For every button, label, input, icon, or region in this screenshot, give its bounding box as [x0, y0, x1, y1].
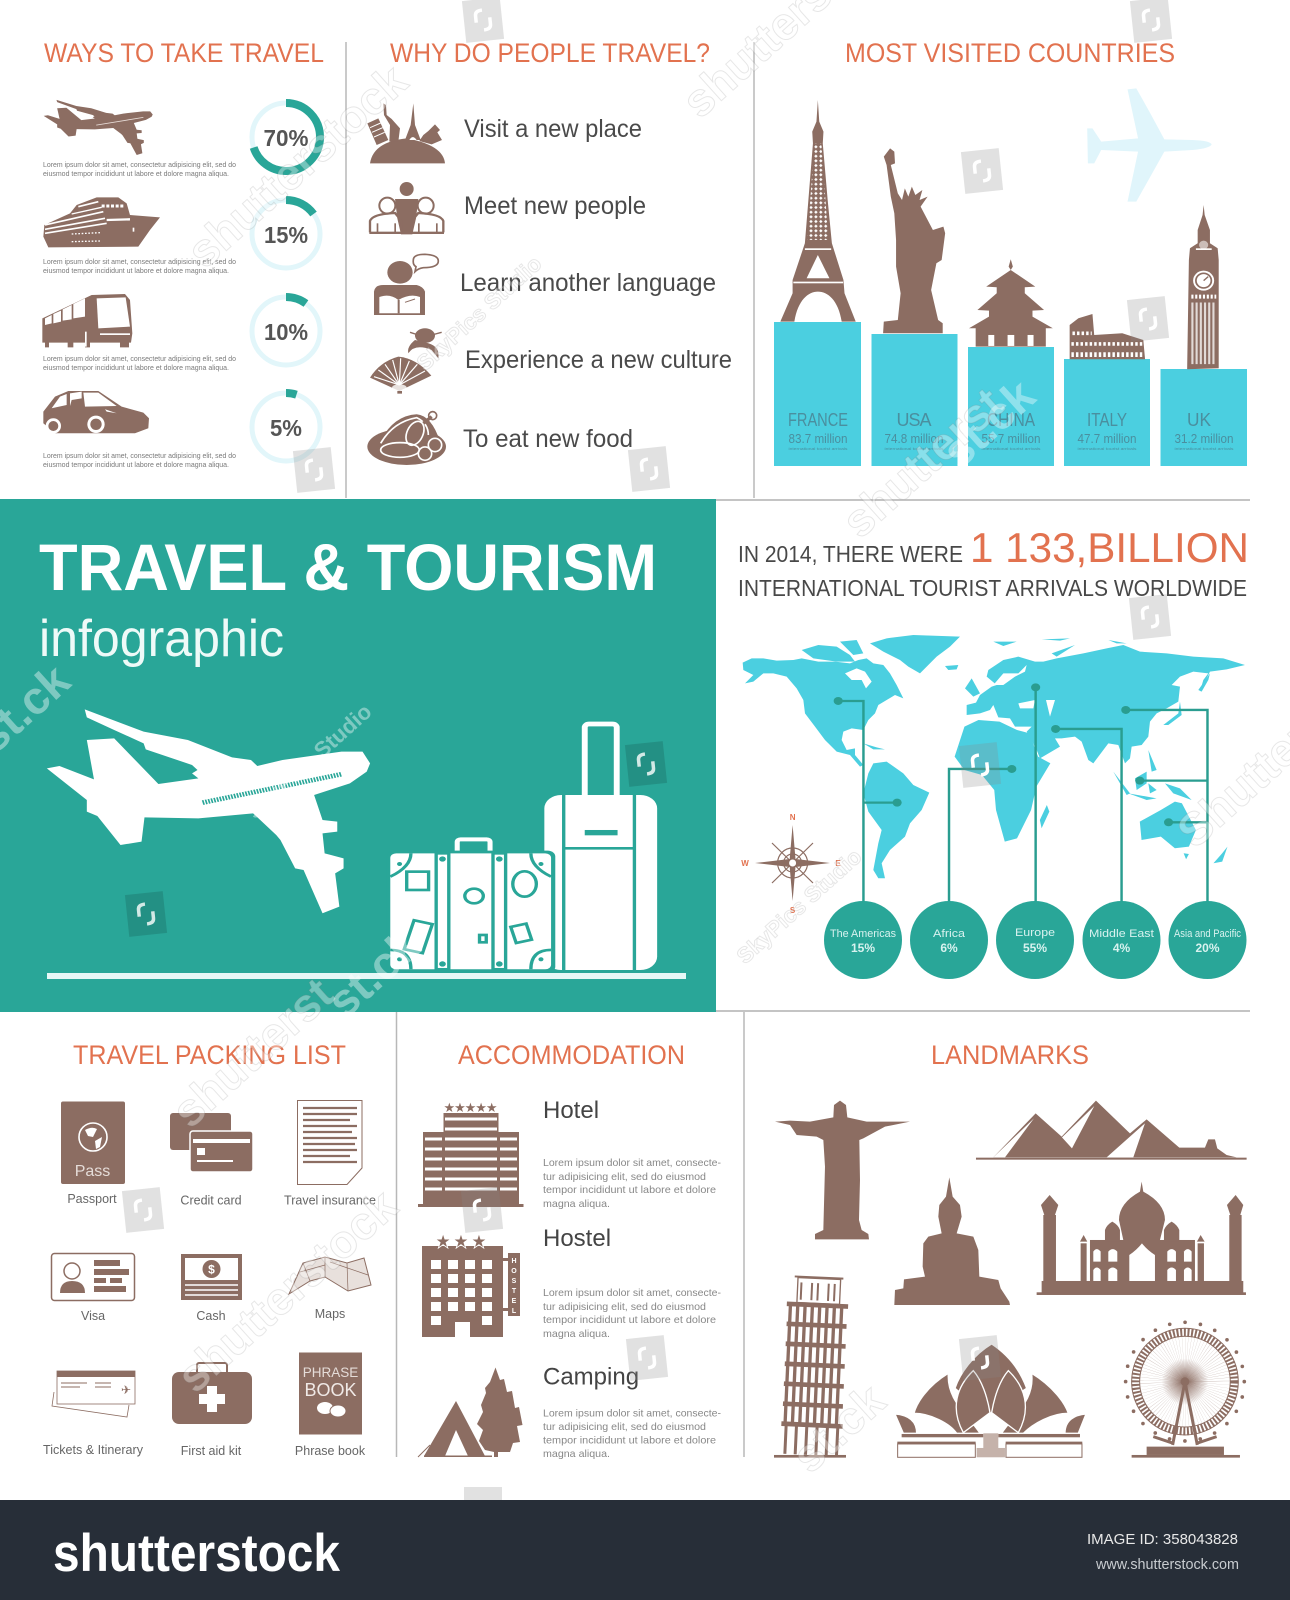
panel: travel packing list: [43, 1040, 376, 1458]
bar: France: [774, 322, 861, 466]
icon: hostel: S: [512, 1278, 517, 1285]
circle: The Americas: [824, 901, 902, 979]
item: cash: [181, 1254, 242, 1323]
item: cash: $: [208, 1262, 215, 1276]
text block: camping description: Lorem ipsum dolor sit amet, consecte-: [543, 1408, 721, 1420]
item: maps: [289, 1257, 371, 1321]
icon: vintage suitcase with stickers: [387, 839, 555, 973]
icon: rolling suitcase: [544, 724, 657, 970]
watermark overlay: SkyPics Studio: [732, 844, 866, 969]
circle: Asia and Pacific: 20%: [1195, 941, 1220, 955]
icon: hostel: E: [512, 1298, 517, 1305]
donut: 15%: 15%: [264, 222, 308, 248]
watermark overlay: shutterst: [832, 377, 1013, 547]
text block: hotel description: [543, 1157, 721, 1210]
donut: 5%: 5%: [270, 415, 302, 441]
circle: Middle East: Middle East: [1089, 928, 1154, 940]
icon: people meeting: [369, 182, 444, 234]
compass rose: N: [790, 813, 796, 822]
bar: USA: international tourist arrivals: [884, 447, 944, 451]
item: phrase book: [295, 1352, 366, 1458]
text block: hostel description: tur adipisicing elit, sed do eiusmod: [543, 1301, 706, 1313]
item: cash: Cash: [196, 1309, 226, 1323]
icon: big ben: [1187, 205, 1219, 369]
heading: ways to take travel: WAYS TO TAKE TRAVEL: [44, 38, 324, 68]
item: first aid kit: [172, 1363, 252, 1458]
panel: accommodation: [418, 1040, 721, 1460]
watermark overlay: shutterstock: [167, 1179, 407, 1402]
icon: large white airplane: [47, 709, 370, 913]
icon: airplane: [44, 100, 153, 155]
bar: USA: USA: [896, 410, 932, 430]
circle: The Americas: 15%: [851, 941, 875, 955]
icon: taj mahal: [1037, 1182, 1246, 1295]
bar: UK: [1160, 369, 1247, 466]
label: learn another language: Learn another language: [460, 269, 716, 297]
icon: hotel: [418, 1100, 524, 1207]
text block: lorem 2: eiusmod tempor incididunt ut labore et dolore magna aliqua.: [43, 266, 229, 275]
label: visit a new place: Visit a new place: [464, 115, 642, 143]
text block: hotel description: Lorem ipsum dolor sit amet, consecte-: [543, 1157, 721, 1169]
donut: 10%: 10%: [264, 319, 308, 345]
icon: person reading with speech bubble: [374, 254, 438, 315]
text block: camping description: tempor incididunt ut labore et dolore: [543, 1434, 716, 1446]
label: hotel: Hotel: [543, 1097, 599, 1124]
label: camping: Camping: [543, 1364, 639, 1390]
bar: France: 83.7 million: [788, 432, 848, 446]
label: hostel: Hostel: [543, 1225, 611, 1252]
heading: tourist arrivals headline: INTERNATIONAL TOURIST ARRIVALS WORLDWIDE: [738, 575, 1247, 601]
bar: China: CHINA: [987, 410, 1035, 430]
icon: hostel: T: [512, 1288, 517, 1295]
heading: travel packing list: TRAVEL PACKING LIST: [73, 1040, 346, 1070]
item: visa: Visa: [81, 1309, 105, 1323]
bar: UK: UK: [1187, 410, 1211, 430]
text block: hostel description: tempor incididunt ut labore et dolore: [543, 1314, 716, 1326]
text block: lorem 3: Lorem ipsum dolor sit amet, consectetur adipisicing elit, sed do: [43, 354, 236, 363]
icon: hostel: H: [511, 1258, 517, 1265]
footer image id: IMAGE ID: 358043828: [1087, 1531, 1238, 1548]
ground line: [47, 973, 686, 979]
circle: Africa: [910, 901, 988, 979]
icon: leaning tower of pisa: [774, 1276, 849, 1458]
icon: eiffel tower: [780, 100, 856, 322]
item: maps: Maps: [315, 1307, 345, 1321]
heading: landmarks: LANDMARKS: [931, 1040, 1089, 1070]
subtitle: infographic: [39, 610, 284, 668]
donut: 10%: [252, 297, 320, 365]
icon: bus: [42, 294, 132, 347]
icon: hotel: ★★★★★: [444, 1100, 498, 1115]
item: travel insurance: [284, 1100, 376, 1208]
watermark overlay: SkyPics Studio: [412, 251, 546, 376]
icon: tent and pine tree: [418, 1368, 522, 1457]
panel: ways to take travel: [42, 38, 324, 469]
text block: lorem 2: [43, 257, 236, 275]
item: visa: [52, 1254, 134, 1323]
icon: fan and geisha: [370, 328, 442, 394]
bar: USA: 74.8 million: [884, 432, 944, 446]
bar: Italy: ITALY: [1087, 410, 1127, 430]
circle: Europe: Europe: [1015, 927, 1055, 939]
icon: ferris wheel: [1126, 1322, 1244, 1458]
icon: hostel: L: [512, 1308, 517, 1315]
watermark overlay: st.ck: [782, 1373, 895, 1482]
circle: Europe: 55%: [1023, 941, 1047, 955]
icon: car: [43, 391, 149, 434]
watermark overlay: shutterst: [162, 967, 343, 1137]
circle: Asia and Pacific: Asia and Pacific: [1174, 928, 1241, 940]
footer image id: [1087, 1531, 1239, 1573]
main title: TRAVEL & TOURISM: [39, 530, 657, 604]
heading: tourist arrivals headline: [738, 524, 1249, 601]
heading: accommodation: ACCOMMODATION: [458, 1040, 685, 1070]
compass rose: S: [790, 906, 796, 915]
item: credit card: Credit card: [180, 1194, 242, 1208]
text block: lorem 4: Lorem ipsum dolor sit amet, consectetur adipisicing elit, sed do: [43, 451, 236, 460]
icon: statue of liberty: [883, 148, 945, 333]
text block: lorem 1: Lorem ipsum dolor sit amet, consectetur adipisicing elit, sed do: [43, 160, 236, 169]
bar: France: FRANCE: [788, 410, 848, 430]
heading: tourist arrivals headline: 1 133,BILLION: [970, 524, 1249, 571]
text block: hostel description: [543, 1287, 721, 1340]
bar: France: international tourist arrivals: [788, 447, 848, 451]
donut: 70%: 70%: [264, 125, 308, 151]
label: experience a new culture: Experience a new culture: [465, 346, 732, 374]
watermark overlay: shutterstock: [177, 54, 417, 277]
item: passport: Pass: [75, 1163, 110, 1180]
panel: world tourist arrivals: [738, 524, 1249, 979]
item: phrase book: Phrase book: [295, 1444, 366, 1458]
watermark overlay: SkyPics Studio: [242, 699, 376, 824]
heading: tourist arrivals headline: IN 2014, THERE WERE: [738, 541, 963, 567]
icon: buddha: [894, 1177, 1010, 1305]
world map: [743, 635, 1245, 878]
icon: roast chicken: [367, 412, 446, 465]
label: meet new people: Meet new people: [464, 192, 646, 220]
watermark overlay: st.ck: [932, 368, 1045, 477]
bar: UK: 31.2 million: [1174, 432, 1234, 446]
compass rose: [741, 813, 841, 915]
text block: lorem 3: [43, 354, 236, 372]
item: phrase book: BOOK: [304, 1380, 357, 1400]
circle: Africa: Africa: [933, 928, 966, 940]
item: first aid kit: First aid kit: [181, 1444, 242, 1458]
item: tickets and itinerary: Tickets & Itinerary: [43, 1443, 144, 1457]
item: phrase book: PHRASE: [303, 1365, 358, 1380]
text block: hostel description: magna aliqua.: [543, 1328, 610, 1340]
bar: China: [968, 347, 1054, 466]
donut: 15%: [252, 200, 320, 268]
bar: Italy: international tourist arrivals: [1078, 447, 1137, 451]
bar: China: 55.7 million: [982, 432, 1041, 446]
text block: lorem 3: eiusmod tempor incididunt ut labore et dolore magna aliqua.: [43, 363, 229, 372]
compass rose: W: [741, 859, 749, 868]
label: to eat new food: To eat new food: [463, 425, 633, 453]
circle: Africa: 6%: [940, 941, 958, 955]
heading: most visited countries: MOST VISITED COUNTRIES: [845, 38, 1175, 68]
item: tickets and itinerary: ✈: [121, 1383, 131, 1397]
icon: temple of heaven: [969, 259, 1053, 347]
panel: landmarks: [774, 1040, 1247, 1458]
item: travel insurance: Travel insurance: [284, 1194, 376, 1208]
text block: hotel description: magna aliqua.: [543, 1198, 610, 1210]
bar: Italy: [1064, 359, 1150, 466]
bar: China: international tourist arrivals: [982, 447, 1041, 451]
circle: Asia and Pacific: [1168, 901, 1246, 979]
text block: lorem 2: Lorem ipsum dolor sit amet, consectetur adipisicing elit, sed do: [43, 257, 236, 266]
panel: why do people travel: [367, 38, 732, 465]
icon: light blue airplane: [1087, 88, 1212, 202]
text block: hotel description: tempor incididunt ut labore et dolore: [543, 1184, 716, 1196]
item: tickets and itinerary: [43, 1371, 144, 1457]
item: passport: [61, 1102, 125, 1206]
donut: 5%: [252, 393, 320, 461]
text block: camping description: [543, 1408, 721, 1460]
circle: The Americas: The Americas: [830, 928, 896, 940]
circle: Middle East: 4%: [1113, 941, 1131, 955]
item: credit card: [170, 1113, 253, 1208]
footer image id: www.shutterstock.com: [1095, 1556, 1239, 1573]
footer bar: [0, 1500, 1290, 1600]
bar: UK: international tourist arrivals: [1174, 447, 1234, 451]
text block: camping description: tur adipisicing elit, sed do eiusmod: [543, 1421, 706, 1433]
text block: lorem 4: [43, 451, 236, 469]
bar: Italy: 47.7 million: [1078, 432, 1137, 446]
icon: landmarks on globe: [367, 103, 445, 163]
text block: lorem 1: [43, 160, 236, 178]
text block: hostel description: Lorem ipsum dolor sit amet, consecte-: [543, 1287, 721, 1299]
donut: 70%: [252, 103, 320, 171]
item: passport: Passport: [67, 1192, 117, 1206]
text block: camping description: magna aliqua.: [543, 1448, 610, 1460]
bar: USA: [872, 334, 958, 466]
text block: hotel description: tur adipisicing elit, sed do eiusmod: [543, 1171, 706, 1183]
text block: lorem 1: eiusmod tempor incididunt ut labore et dolore magna aliqua.: [43, 169, 229, 178]
icon: hostel: [422, 1231, 520, 1337]
heading: why do people travel: WHY DO PEOPLE TRAVEL?: [390, 38, 710, 68]
watermark overlay: st.ck: [317, 918, 430, 1027]
map connector lines: [834, 683, 1207, 903]
text block: lorem 4: eiusmod tempor incididunt ut labore et dolore magna aliqua.: [43, 460, 229, 469]
icon: hostel: O: [511, 1268, 517, 1275]
icon: cruise ship: [43, 197, 160, 247]
icon: christ the redeemer: [775, 1101, 910, 1239]
icon: pyramids and sphinx: [976, 1101, 1247, 1160]
panel: main teal title: [0, 499, 716, 1012]
panel: most visited countries: [774, 38, 1247, 466]
circle: Middle East: [1082, 901, 1160, 979]
circle: Europe: [996, 901, 1074, 979]
icon: hostel: ★★★: [434, 1231, 488, 1253]
footer logo: shutterstock: [53, 1524, 340, 1583]
compass rose: E: [835, 859, 841, 868]
icon: colosseum: [1070, 314, 1145, 359]
icon: lotus temple: [895, 1344, 1086, 1457]
